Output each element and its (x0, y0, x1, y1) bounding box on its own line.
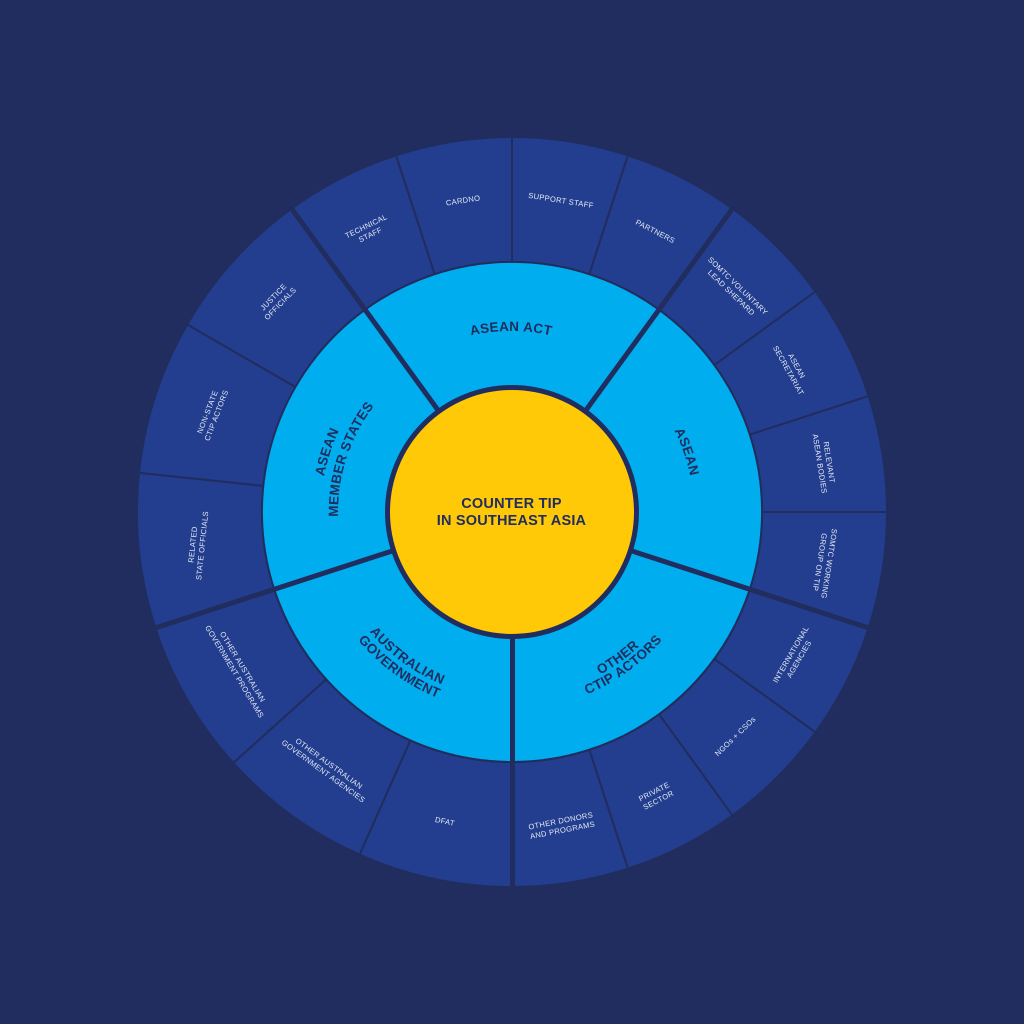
segment: justice officials: OFFICIALS (263, 285, 298, 322)
segment: cardno (396, 137, 512, 274)
segment: somtc voluntary lead shepard: LEAD SHEPARD (706, 268, 757, 318)
segment: somtc voluntary lead shepard: SOMTC VOLUNTARY (706, 255, 770, 317)
segment: partners (589, 155, 732, 310)
segment: other australian government agencies: OTHER AUSTRALIAN (294, 736, 364, 791)
segment: international agencies: AGENCIES (785, 639, 813, 679)
segment: non-state ctip actors: CTIP ACTORS (203, 389, 230, 442)
segment: other australian government programs: GOVERNMENT PROGRAMS (203, 624, 266, 720)
segment: private sector: PRIVATE (637, 780, 671, 803)
segment: dfat (360, 740, 512, 887)
sector: asean act (366, 260, 658, 408)
segment: non-state ctip actors: NON-STATE (195, 389, 220, 435)
sector: asean: ASEAN (674, 430, 699, 476)
segment: other australian government programs: OTHER AUSTRALIAN (218, 630, 267, 704)
segment: non-state ctip actors (139, 324, 296, 486)
segment: private sector (589, 714, 732, 869)
sector: asean member states: ASEAN (316, 428, 338, 476)
segment: somtc working group on tip (750, 512, 887, 628)
segment: international agencies (714, 589, 869, 732)
segment: international agencies: INTERNATIONAL (771, 624, 811, 684)
segment: somtc voluntary lead shepard (659, 209, 815, 365)
segment: private sector: SECTOR (642, 789, 675, 812)
segment: justice officials: JUSTICE (259, 282, 288, 312)
segment: related state officials (137, 473, 274, 628)
segment: asean secretariat: SECRETARIAT (771, 344, 806, 397)
segment: support staff: SUPPORT STAFF (528, 191, 594, 210)
segment: other donors and programs (512, 750, 628, 887)
segment: somtc working group on tip: GROUP ON TIP (811, 533, 829, 592)
segment: other donors and programs: OTHER DONORS (528, 810, 594, 832)
segment: asean secretariat: ASEAN (786, 352, 807, 380)
sector: australian government: GOVERNMENT (360, 636, 441, 697)
segment: cardno: CARDNO (445, 193, 481, 208)
segment: technical staff: TECHNICAL (344, 212, 389, 240)
segment: relevant asean bodies: ASEAN BODIES (811, 433, 829, 494)
segment: dfat: DFAT (434, 815, 456, 828)
segment: justice officials (187, 209, 365, 387)
segment: other australian government agencies (233, 679, 410, 855)
segment: related state officials: RELATED (186, 526, 199, 563)
centre title: IN SOUTHEAST ASIA (437, 513, 587, 529)
outer ring: stakeholder segments (137, 137, 887, 887)
main dividers (154, 208, 870, 888)
segment: ngos and csos (659, 659, 815, 815)
segment: technical staff: STAFF (357, 225, 384, 244)
segment: relevant asean bodies (750, 396, 887, 512)
sector: other ctip actors: OTHER (598, 641, 639, 673)
segment: asean secretariat (714, 292, 869, 435)
sector: asean member states: MEMBER STATES (328, 402, 372, 516)
sector: other ctip actors (515, 554, 750, 763)
segment: other australian government agencies: GOVERNMENT AGENCIES (280, 738, 367, 805)
sector: asean member states (261, 310, 436, 587)
segment: related state officials: STATE OFFICIALS (194, 511, 210, 580)
centre circle (388, 388, 636, 636)
segment: support staff (512, 137, 628, 274)
segment: partners: PARTNERS (634, 218, 677, 245)
segment: technical staff (292, 155, 435, 310)
segment: somtc working group on tip: SOMTC WORKING (819, 528, 839, 599)
middle ring: stakeholder groups (261, 260, 763, 763)
sector: asean (588, 310, 763, 587)
segment: ngos and csos: NGOs + CSOs (713, 715, 758, 758)
segment: other donors and programs: AND PROGRAMS (529, 819, 596, 841)
sector: australian government: AUSTRALIAN (370, 628, 445, 684)
segment: other australian government programs (155, 589, 326, 763)
sector: australian government (274, 554, 510, 763)
sector: asean act: ASEAN ACT (471, 322, 552, 336)
centre title: COUNTER TIP (461, 496, 562, 512)
segment: relevant asean bodies: RELEVANT (821, 441, 837, 484)
sector: other ctip actors: CTIP ACTORS (585, 636, 661, 693)
